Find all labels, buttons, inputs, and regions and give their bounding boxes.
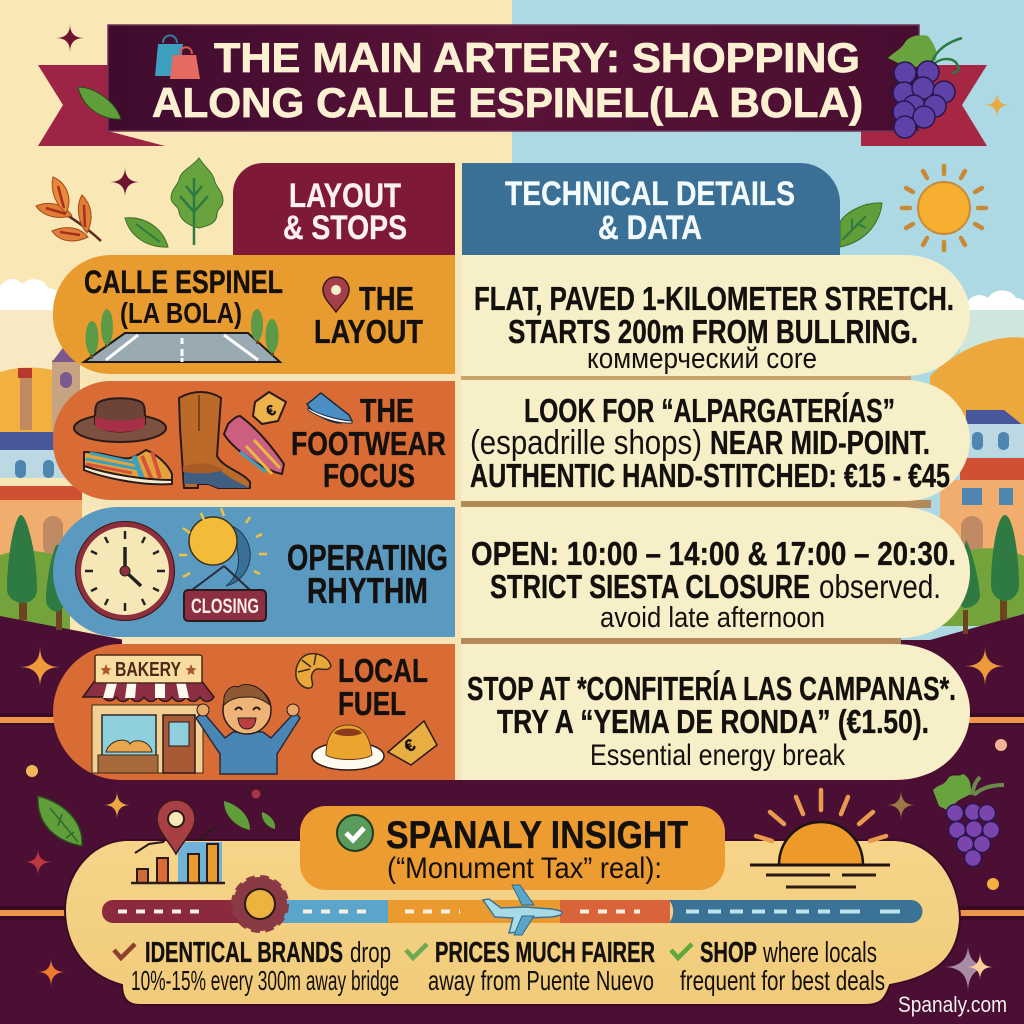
text: operating details: [471, 535, 956, 634]
panel: layout and stops header: & STOPS: [283, 209, 407, 247]
icon: green leaves: [125, 158, 223, 247]
text: operating rhythm: OPERATING: [287, 537, 448, 578]
text: operating details: observed.: [819, 568, 941, 605]
icon: striped espadrille: [84, 450, 172, 484]
icon: gear: [234, 878, 286, 930]
panel: row 2 footwear focus: [53, 380, 970, 501]
panel: technical details header: [462, 163, 840, 255]
text: insight point 3: SHOP: [700, 937, 757, 969]
text: layout details: коммерческий core: [587, 343, 817, 375]
text: the layout: THE: [359, 280, 414, 317]
text: operating details: STRICT SIESTA CLOSURE: [490, 568, 810, 605]
timeline bar: [102, 878, 922, 935]
icon: sun: [902, 166, 986, 250]
text: insight point 3: [671, 937, 885, 996]
text: footwear focus: THE: [360, 392, 414, 429]
icon: grapes bottom right: [933, 774, 1004, 866]
icon: sparkle watermark: [944, 944, 993, 992]
text: operating details: avoid late afternoon: [600, 602, 825, 634]
right ribbon tail: [861, 65, 987, 146]
icon: autumn twig: [36, 177, 101, 241]
text: insight point 1: [114, 937, 399, 996]
icon: sun moon closing sign: [179, 508, 267, 621]
text: insight point 3: where locals: [762, 937, 877, 969]
icon: flan with tag: €: [401, 735, 419, 756]
text: local fuel details: [467, 670, 956, 772]
icon: flan with tag: [312, 721, 437, 770]
icon: bakery shop: [83, 655, 214, 773]
panel: row 3 operating rhythm: [53, 507, 970, 638]
watermark: spanaly.com: Spanaly.com: [898, 992, 1007, 1017]
text: footwear details: [470, 392, 950, 494]
text: insight point 1: IDENTICAL BRANDS: [145, 937, 343, 969]
title text: ALONG CALLE ESPINEL(LA BOLA): [152, 79, 863, 126]
icon: clock: [76, 522, 174, 620]
text: calle espinel label: (LA BOLA): [120, 298, 242, 330]
icon: airplane: [483, 885, 562, 935]
panel: layout and stops header: LAYOUT: [289, 177, 401, 215]
text: insight point 3: frequent for best deals: [680, 965, 885, 996]
icon: blue sneaker: [307, 393, 352, 423]
text: local fuel details: Essential energy break: [590, 739, 846, 772]
text: insight point 2: away from Puente Nuevo: [428, 965, 654, 996]
text: layout details: STARTS 200m FROM BULLRING.: [508, 313, 918, 350]
icon: road with trees: [84, 309, 280, 362]
title text: THE MAIN ARTERY: SHOPPING: [214, 34, 860, 81]
icon: grapes top right: [888, 35, 962, 138]
icon: leaves decoration: [38, 796, 275, 846]
text: footwear details: (espadrille shops): [470, 424, 702, 462]
panel: row 4 local fuel: [53, 644, 970, 780]
text: footwear focus: [291, 392, 446, 494]
icon: leather boot: [179, 392, 250, 488]
icon: hat: [74, 398, 166, 442]
panel: row 1 the layout: [53, 255, 970, 376]
panel: technical details header: TECHNICAL DETAILS: [505, 175, 795, 213]
icon: location pin: [323, 277, 349, 312]
panel: layout and stops header: [233, 163, 455, 255]
text: local fuel: [338, 652, 428, 722]
text: footwear focus: FOOTWEAR: [291, 425, 446, 462]
icon: sunset: [750, 790, 890, 887]
icon: price tag with shoe: [224, 392, 286, 474]
text: footwear details: NEAR MID-POINT.: [710, 424, 930, 461]
icon: leaf behind header: [840, 203, 882, 247]
text: the layout: [314, 280, 423, 350]
text: insight point 1: 10%-15% every 300m away bridge: [131, 965, 399, 996]
text: footwear details: LOOK FOR “ALPARGATERÍAS”: [524, 392, 895, 429]
text: operating rhythm: RHYTHM: [307, 570, 428, 611]
text: insight point 2: [406, 937, 655, 996]
icon: shopping bags: [155, 36, 200, 79]
icon: price tag with shoe: €: [263, 401, 280, 421]
title text: [152, 34, 863, 126]
icon: bakery shop: BAKERY: [115, 659, 182, 681]
text: insight point 2: PRICES MUCH FAIRER: [435, 937, 655, 969]
text: footwear focus: FOCUS: [323, 457, 415, 494]
icon: croissant: [296, 654, 331, 688]
text: operating rhythm: [287, 537, 448, 611]
panel: spanaly insight: [38, 790, 960, 1005]
insight title box: (“Monument Tax” real):: [387, 852, 662, 885]
text: local fuel details: TRY A “YEMA DE RONDA” (€1.50).: [497, 703, 929, 740]
text: layout details: [474, 280, 954, 375]
icon: sun moon closing sign: CLOSING: [191, 595, 259, 618]
title banner: [38, 25, 987, 146]
text: calle espinel label: [84, 264, 283, 330]
icon: bar chart with pin: [131, 800, 225, 883]
text: the layout: LAYOUT: [314, 313, 423, 350]
text: calle espinel label: CALLE ESPINEL: [84, 264, 283, 300]
icon: left leaf: [78, 87, 121, 119]
banner body: [108, 25, 919, 131]
icon: happy person: [196, 684, 300, 774]
insight title box: SPANALY INSIGHT: [386, 814, 688, 857]
panel: technical details header: & DATA: [598, 209, 702, 247]
text: local fuel: FUEL: [338, 685, 406, 722]
text: insight point 1: drop: [350, 937, 391, 969]
insight title box: [300, 806, 725, 890]
insight background panel: [65, 840, 960, 1005]
left ribbon tail: [38, 65, 165, 146]
text: local fuel: LOCAL: [338, 652, 428, 689]
column backing: [82, 255, 931, 780]
